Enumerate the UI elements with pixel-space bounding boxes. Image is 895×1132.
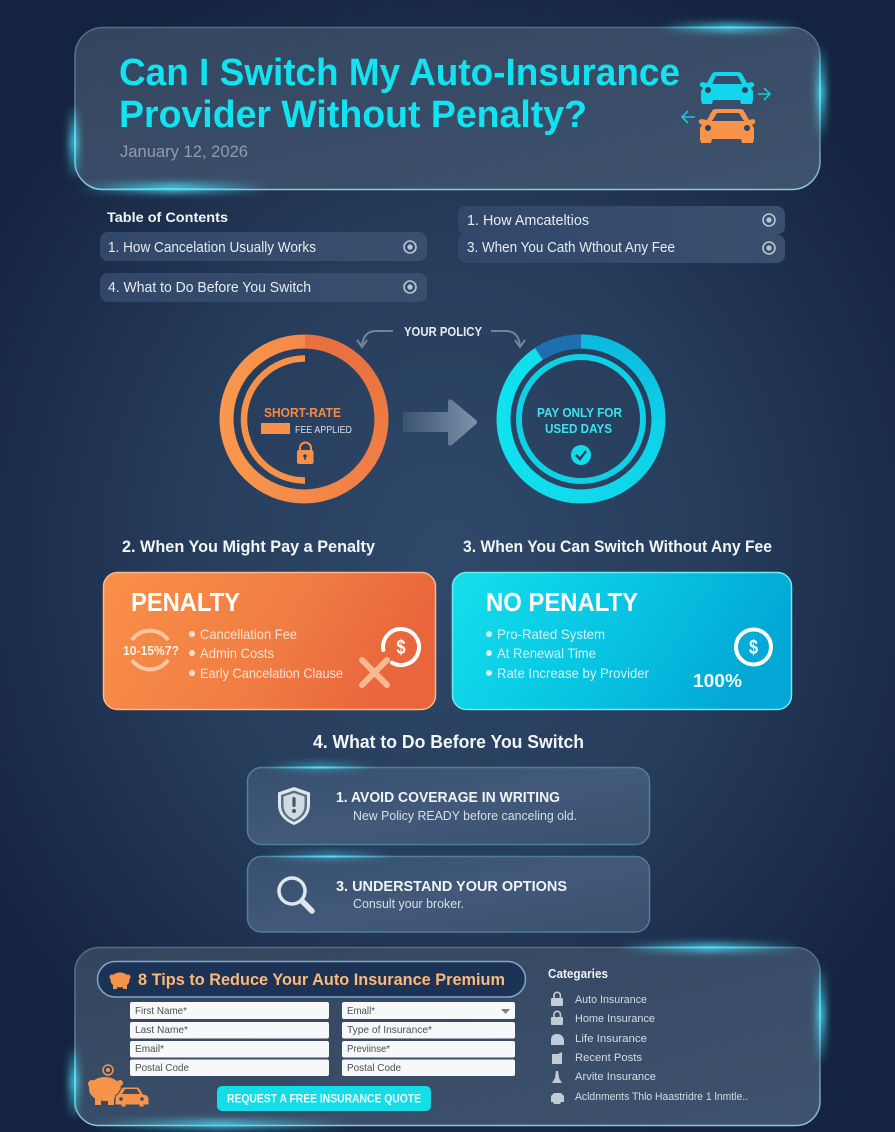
arrow: to pro-rated ring (491, 331, 525, 347)
icon: lock (297, 442, 314, 464)
category items: Home Insurance (575, 1013, 655, 1025)
quote form fields: Email* (135, 1043, 164, 1055)
fee bar (261, 423, 290, 434)
icon: small piggy bank (110, 972, 130, 989)
panel: penalty (104, 572, 436, 710)
no penalty heading: NO PENALTY (486, 587, 638, 617)
tips banner: 8 Tips to Reduce Your Auto Insurance Premium (138, 971, 505, 989)
no penalty list: At Renewal Time (497, 645, 596, 661)
toc item: how amcateltios (458, 206, 785, 234)
short-rate text: SHORT-RATE (264, 405, 341, 420)
icon: shield (278, 787, 310, 825)
category items: Acldnments Thlo Haastridre 1 lnmtle.. (575, 1091, 748, 1103)
button: request quote: REQUEST A FREE INSURANCE QUOTE (227, 1092, 421, 1106)
penalty list: Admin Costs (200, 645, 274, 661)
quote form fields: Previinse* (347, 1043, 390, 1055)
toc item: how cancelation works: 1. How Cancelation Usually Works (108, 240, 316, 256)
title line 2: Provider Without Penalty? (119, 94, 587, 136)
step description: New Policy READY before canceling old. (353, 808, 577, 823)
arrow: transition (403, 399, 477, 446)
penalty list: Early Cancelation Clause (200, 665, 343, 681)
panel: avoid coverage (248, 764, 650, 844)
categories heading: Categaries (548, 967, 608, 981)
icon: check (571, 445, 591, 465)
toc item: when you can: 3. When You Cath Wthout Any Fee (467, 240, 675, 256)
category items: Arvite Insurance (575, 1071, 656, 1083)
quote form fields (130, 1002, 515, 1076)
category items (575, 994, 748, 1103)
percent gauge (123, 631, 179, 669)
icon: dollar (736, 630, 771, 664)
icon: cyan car with right arrow (700, 72, 770, 104)
your policy label: YOUR POLICY (404, 325, 483, 339)
icon: dollar: $ (749, 637, 758, 659)
heading: section 4: 4. What to Do Before You Switch (313, 732, 584, 752)
diagram: policy comparison (226, 325, 658, 496)
category items: Recent Posts (575, 1052, 643, 1064)
title: Can I Switch My Auto-Insurance (119, 52, 680, 94)
arrow: to short-rate ring (357, 331, 393, 347)
panel: footer (70, 944, 825, 1128)
toc item: what to do (100, 273, 427, 302)
ring: pay for used days (504, 342, 658, 496)
toc heading: Table of Contents (107, 209, 228, 225)
quote form fields: Postal Code (135, 1062, 189, 1074)
quote form fields: Emall* (347, 1005, 375, 1017)
panel: header (70, 24, 825, 192)
icon: dollar with x: $ (396, 637, 406, 659)
penalty list (189, 626, 343, 681)
used days text: USED DAYS (545, 421, 612, 436)
fee applied text: FEE APPLIED (295, 424, 352, 436)
panel: table of contents (100, 206, 785, 302)
category icons (551, 992, 564, 1104)
tips banner (98, 962, 526, 997)
heading: section 3: 3. When You Can Switch Without Any Fee (463, 537, 772, 556)
step title: 1. AVOID COVERAGE IN WRITING (336, 790, 560, 806)
category items: Life Insurance (575, 1033, 647, 1045)
ring: short-rate (226, 342, 382, 496)
icon: magnifier (279, 878, 312, 911)
panel: no penalty (452, 572, 792, 710)
pay only text: PAY ONLY FOR (537, 405, 623, 420)
toc item: how amcateltios: 1. How Amcateltios (467, 213, 589, 229)
toc item: how cancelation works (100, 232, 427, 261)
no penalty list: Pro-Rated System (497, 626, 605, 642)
button: request quote (217, 1086, 431, 1111)
step title: 3. UNDERSTAND YOUR OPTIONS (336, 879, 567, 895)
percent gauge: 10-15%7? (123, 643, 179, 658)
quote form fields: First Name* (135, 1005, 187, 1017)
icon: orange car with left arrow (682, 109, 755, 143)
panel: understand options (248, 853, 650, 932)
no penalty list (486, 626, 649, 681)
penalty list: Cancellation Fee (200, 626, 297, 642)
penalty heading: PENALTY (131, 587, 240, 617)
step description: Consult your broker. (353, 896, 464, 911)
category items: Auto Insurance (575, 994, 647, 1006)
quote form fields: Type of Insurance* (347, 1024, 432, 1036)
quote form fields: Last Name* (135, 1024, 188, 1036)
no penalty list: Rate Increase by Provider (497, 665, 649, 681)
icon: piggy bank and car (88, 1065, 149, 1107)
date: January 12, 2026 (120, 143, 248, 161)
heading: section 2: 2. When You Might Pay a Penalty (122, 537, 376, 556)
categories list (548, 967, 748, 1104)
100 percent label: 100% (693, 671, 742, 691)
toc item: when you can (458, 234, 785, 263)
icon: dollar with x (362, 629, 419, 685)
quote form fields: Postal Code (347, 1062, 401, 1074)
toc item: what to do: 4. What to Do Before You Switch (108, 280, 311, 296)
